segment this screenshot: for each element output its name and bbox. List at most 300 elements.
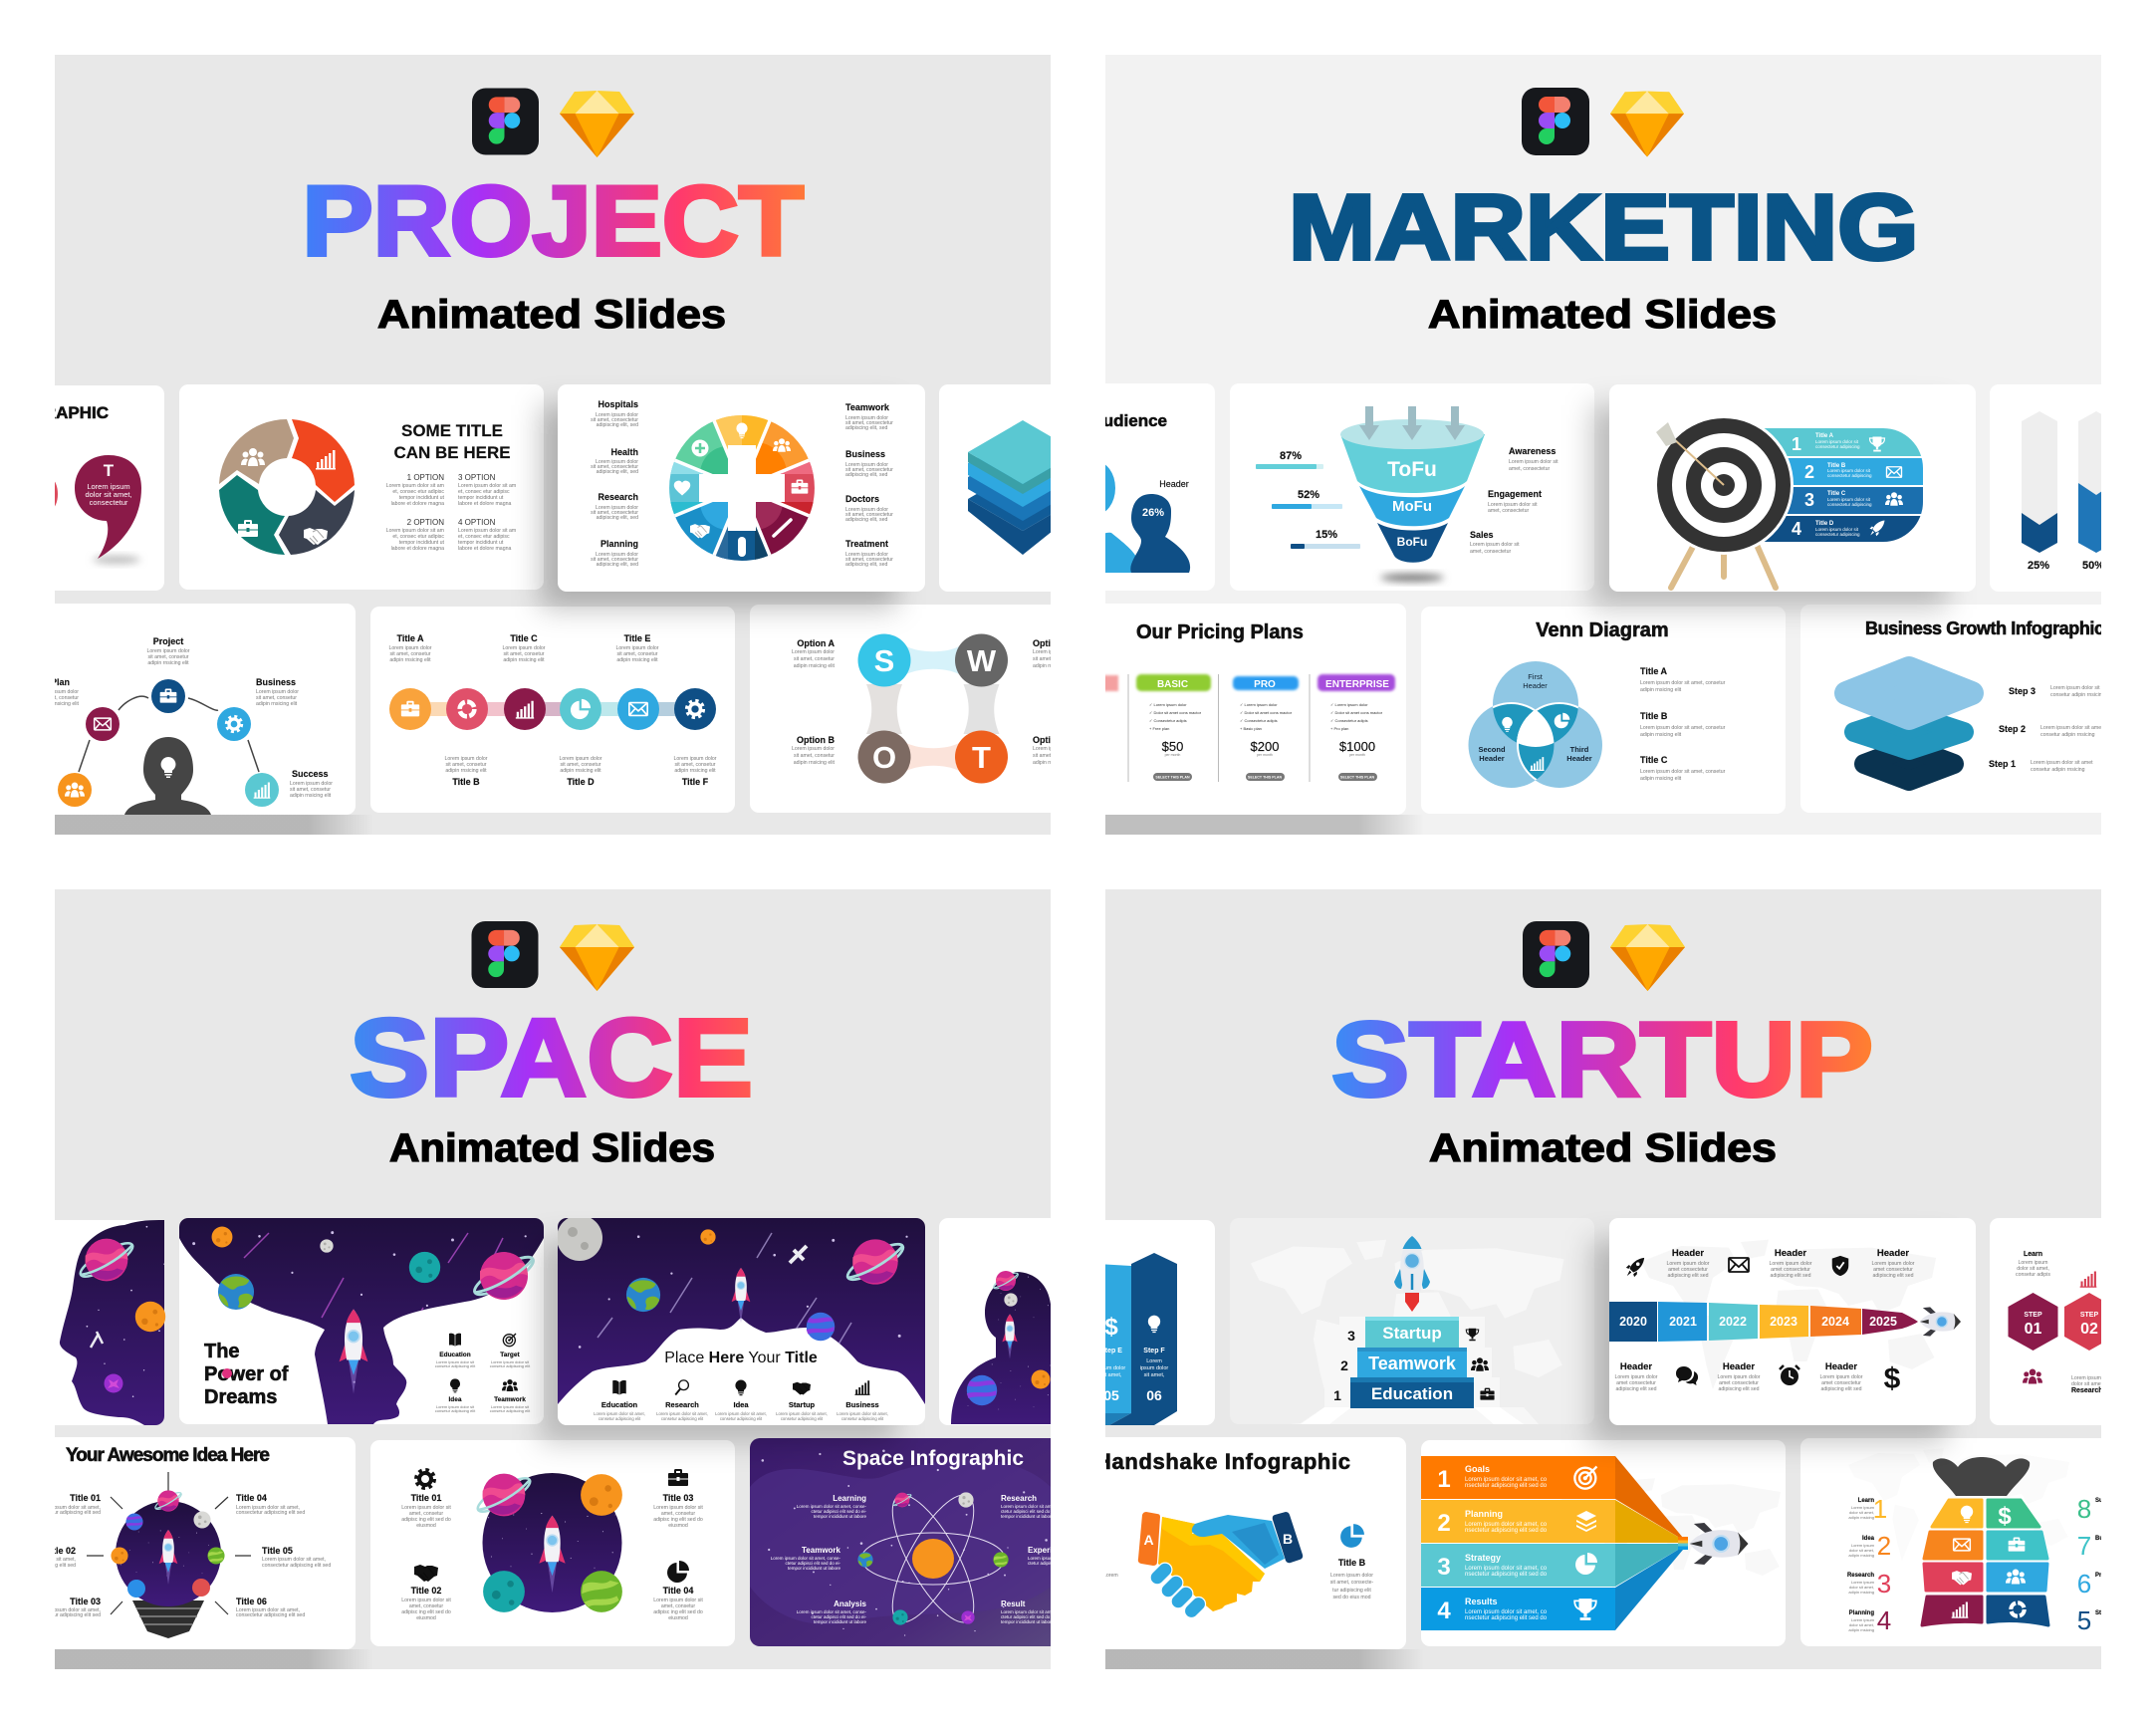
card: place here your title: Idea — [733, 1400, 749, 1409]
card: medical wheel: Hospitals — [598, 399, 638, 409]
chart: funnel: MoFu — [1392, 498, 1432, 515]
card: timeline ribbon: adipiscing elit sed — [1719, 1386, 1760, 1392]
card: timeline circles: Title C — [510, 633, 538, 643]
card: planets circle: Lorem ipsum dolor sit — [401, 1598, 451, 1603]
card: stair steps — [1230, 1218, 1594, 1424]
card: timeline ribbon: amet consectetur — [1873, 1267, 1913, 1273]
card: pricing plans: + Free plan — [1149, 726, 1169, 731]
icon: handshake: A — [1143, 1532, 1154, 1548]
card: timeline circles: adipin rnsicing elit — [503, 657, 545, 663]
icon: sketch logo — [560, 91, 634, 157]
card: medical wheel: Health — [610, 447, 638, 457]
icon: bullseye — [1654, 415, 1794, 588]
card: planets circle: amet, consetur — [409, 1511, 443, 1517]
title: space: SPACE — [350, 997, 753, 1119]
card: planets circle: adipisc ing elit sed do — [653, 1609, 703, 1615]
chart: three circle venn: First — [1528, 672, 1544, 681]
card: four goals rocket: nsectetur adipiscing elit sed do — [1465, 1483, 1548, 1489]
card: power of dreams: The — [204, 1341, 240, 1362]
card: four goals rocket: Planning — [1465, 1509, 1503, 1519]
chart: progress bars — [1256, 450, 1360, 549]
card: four goals rocket: nsectetur adipiscing elit sed do — [1465, 1615, 1548, 1621]
card: medical wheel: adipiscing elit, sed — [597, 422, 638, 428]
card: cycle donut: tempor incididunt ut — [458, 540, 504, 546]
card: cycle donut: 4 OPTION — [458, 518, 496, 527]
card: space infographic: Lorem ipsum dolor sit amet, conse- — [797, 1609, 866, 1614]
card: place here your title: Lorem ipsum dolor sit amet, — [594, 1411, 645, 1416]
card: timeline circles: sit amet, consetur — [675, 762, 716, 768]
card: medical wheel: Lorem ipsum dolor — [596, 552, 638, 558]
card: money bag: dolor sit amet, — [1849, 1585, 1874, 1590]
card: cycle donut — [179, 384, 544, 590]
card: steps columns — [1076, 1220, 1215, 1425]
card: hexagon steps: 01 — [2025, 1321, 2041, 1338]
card: SWOT: W — [967, 643, 997, 678]
card: planets circle: eiusmod — [416, 1523, 436, 1529]
card: speech bubble infographic — [25, 385, 164, 591]
card: timeline circles: adipin rnsicing elit — [445, 768, 487, 774]
card: money bag: Planning — [1849, 1610, 1874, 1616]
card: cycle donut: tempor incididunt ut — [458, 495, 504, 501]
icon: figma logo — [1523, 921, 1589, 988]
card: planets circle: Title 01 — [411, 1493, 441, 1503]
card: venn diagram: Title A — [1640, 666, 1668, 676]
card: cycle donut: CAN BE HERE — [393, 443, 511, 462]
card: timeline circles: sit amet, consetur — [390, 651, 431, 657]
chart: converging stripes — [1421, 1456, 1749, 1630]
card: awesome idea bulb: Title 04 — [236, 1493, 267, 1503]
card: pricing plans: SELECT THIS PLAN — [1248, 775, 1282, 779]
card: space infographic: tempor incididunt ut labore — [788, 1566, 840, 1571]
card: pricing plans: ✓ Lorem ipsum dolor — [1149, 702, 1187, 707]
card: medical wheel: Lorem ipsum dolor — [845, 552, 888, 558]
icon: figma logo — [472, 88, 539, 155]
card: funnel: amet, consectetur — [1470, 549, 1512, 555]
card: place here your title — [557, 1215, 925, 1425]
card: timeline circles: sit amet, consetur — [446, 762, 487, 768]
card: target: Lorem ipsum dolor sit — [1827, 468, 1871, 473]
card: speech bubble infographic: consectetur — [90, 498, 128, 507]
card: pricing plans: SELECT THIS PLAN — [1155, 775, 1190, 779]
card: space infographic: Teamwork — [802, 1546, 841, 1555]
card: planets circle: Title 02 — [411, 1586, 441, 1596]
card: funnel — [1230, 383, 1594, 591]
chart: three circle venn — [1468, 661, 1602, 788]
card: timeline ribbon — [1609, 1218, 1976, 1425]
icon: handshake: B — [1283, 1531, 1293, 1547]
card: medical wheel: Lorem ipsum dolor — [845, 462, 888, 468]
card: timeline ribbon: adipiscing elit sed — [1771, 1273, 1811, 1279]
card: timeline ribbon: amet consectetur — [1616, 1380, 1656, 1386]
card: planets circle: Lorem ipsum dolor sit — [653, 1505, 703, 1511]
card: medical wheel: sit amet, consectetur — [591, 557, 638, 563]
card: SWOT — [750, 605, 1078, 813]
card: planets circle: eiusmod — [668, 1615, 688, 1621]
card: power of dreams: consetur adipiscing elit — [435, 1363, 476, 1368]
card: medical wheel: adipiscing elit, sed — [845, 425, 888, 431]
card: place here your title: Business — [845, 1400, 879, 1409]
card: money bag: 3 — [1877, 1569, 1891, 1599]
card: medical wheel: adipiscing elit, sed — [597, 515, 638, 521]
card: audience — [1076, 383, 1215, 591]
card: awesome idea bulb: Lorem ipsum dolor sit amet, — [236, 1505, 300, 1511]
card: timeline ribbon: $ — [1884, 1362, 1901, 1395]
card: awesome idea bulb: Title 05 — [262, 1546, 293, 1556]
card: money bag: adipin rnsicing — [1848, 1553, 1874, 1558]
chart: money bag puzzle: $ — [1998, 1503, 2012, 1530]
card: target: 2 — [1804, 462, 1814, 482]
card: four goals rocket: Results — [1465, 1597, 1498, 1606]
card: business growth: Step 1 — [1989, 759, 2016, 769]
card: money bag — [1800, 1438, 2129, 1646]
card: SWOT: T — [972, 740, 991, 775]
card: pricing plans: SELECT THIS PLAN — [1340, 775, 1374, 779]
card: pricing plans: $50 — [1162, 739, 1183, 754]
card: four goals rocket — [1421, 1440, 1786, 1646]
card: medical wheel: Planning — [600, 539, 638, 549]
card: pricing plans: BASIC — [1157, 679, 1188, 690]
card: business growth: Lorem ipsum dolor sit amet — [2040, 725, 2101, 731]
card: SWOT: sit amet, consetur — [794, 753, 835, 759]
card: planets circle: Title 03 — [663, 1493, 693, 1503]
card: stair steps: 2 — [1340, 1357, 1348, 1373]
shadow strip under lower-left card — [1105, 1649, 1424, 1669]
card: target: consectetur adipiscing — [1827, 502, 1872, 507]
card: medical wheel: Lorem ipsum dolor — [845, 415, 888, 421]
shadow cast by timeline card — [1591, 1240, 1947, 1443]
icon: sketch logo — [1610, 91, 1684, 157]
card: SWOT: adipin rnsicing elit — [794, 760, 836, 766]
card: timeline ribbon: Header — [1877, 1248, 1909, 1259]
card: steps columns: 06 — [1146, 1387, 1162, 1403]
card: timeline circles: Lorem ipsum dolor — [503, 645, 546, 651]
card: cycle donut: 1 OPTION — [407, 473, 444, 482]
card: pricing plans: ✓ Dolor sit amet cons mactor — [1330, 710, 1383, 715]
chart: three circle venn: Header — [1566, 754, 1592, 763]
card: cycle donut: tempor incididunt ut — [399, 540, 445, 546]
card: awesome idea bulb: Lorem ipsum dolor sit amet, — [236, 1607, 300, 1613]
card: place here your title: Startup — [789, 1400, 816, 1409]
subtitle: Animated Slides — [377, 293, 726, 337]
chart: progress bars: 15% — [1316, 529, 1337, 541]
card: money bag: dolor sit amet, — [1849, 1622, 1874, 1627]
chart: four arrow donut — [219, 419, 355, 555]
card: medical wheel: sit amet, consectetur — [845, 467, 893, 473]
card: medical wheel: Business — [845, 449, 885, 459]
card: four goals rocket: Lorem ipsum dolor sit amet, co — [1465, 1609, 1548, 1615]
card: money bag: dolor sit amet, — [1849, 1510, 1874, 1515]
card: power of dreams: consetur adipiscing elit — [490, 1408, 531, 1413]
card: pricing plans: ✓ Consectetur adipis — [1330, 718, 1368, 723]
card: timeline circles: Title F — [682, 777, 709, 787]
card: medical wheel: sit amet, consectetur — [591, 464, 638, 470]
card: venn diagram: Title B — [1640, 711, 1668, 721]
card: four goals rocket: nsectetur adipiscing elit sed do — [1465, 1572, 1548, 1578]
card: space infographic: Research — [1001, 1494, 1037, 1503]
card: timeline circles: Title A — [396, 633, 424, 643]
card: place here your title: consetur adipiscing elit — [661, 1416, 704, 1421]
subtitle: Animated Slides — [1429, 1126, 1777, 1170]
subtitle: Animated Slides — [1428, 293, 1777, 337]
card: funnel: amet, consectetur — [1509, 466, 1551, 472]
chart: eight segment wheel — [669, 415, 815, 561]
card: cycle donut: Lorem ipsum dolor sit am — [386, 528, 444, 534]
card: timeline circles: Lorem ipsum dolor — [560, 756, 602, 762]
card: pricing plans: ✓ Lorem ipsum dolor — [1240, 702, 1278, 707]
card: space infographic: ctetur adipisci elit sed do ei- — [811, 1509, 866, 1514]
card: planets circle: amet, consetur — [661, 1603, 695, 1609]
card: hexagon steps: Learn — [2024, 1251, 2042, 1258]
card: cycle donut: tempor incididunt ut — [399, 495, 445, 501]
card: timeline ribbon: Lorem ipsum dolor — [1615, 1374, 1658, 1380]
card: timeline ribbon: Lorem ipsum dolor — [1770, 1261, 1812, 1267]
card: project arc: Lorem ipsum dolor — [256, 689, 299, 695]
shadow cast by place-here card — [541, 1240, 896, 1443]
card: hexagon steps: 02 — [2080, 1321, 2098, 1338]
card: power of dreams: Lorem ipsum dolor sit — [491, 1404, 530, 1409]
card: timeline circles: adipin rnsicing elit — [389, 657, 431, 663]
card: awesome idea bulb — [55, 1437, 356, 1649]
card: business growth: Business Growth Infographic — [1865, 618, 2101, 638]
card: funnel: Sales — [1470, 530, 1494, 540]
card: timeline circles: Lorem ipsum dolor — [389, 645, 432, 651]
card: medical wheel: adipiscing elit, sed — [597, 469, 638, 475]
card: hexagon steps: STEP — [2024, 1312, 2042, 1319]
card: medical wheel: Lorem ipsum dolor — [596, 459, 638, 465]
card: venn diagram: Lorem ipsum dolor sit amet, consetur — [1640, 769, 1726, 775]
card: hexagon steps: consetur adipis — [2016, 1272, 2050, 1278]
card: four goals rocket: nsectetur adipiscing elit sed do — [1465, 1528, 1548, 1534]
card: place here your title: consetur adipiscing elit — [781, 1416, 824, 1421]
card: space infographic: Analysis — [834, 1599, 867, 1608]
card: timeline circles: Title D — [567, 777, 595, 787]
card: SWOT: Option B — [797, 735, 835, 745]
card: pricing plans: per month — [1349, 753, 1365, 757]
card: timeline ribbon: Header — [1825, 1361, 1857, 1372]
card: timeline circles: sit amet, consetur — [504, 651, 545, 657]
card: money bag: 8 — [2077, 1494, 2091, 1524]
chart: three circle venn: Header — [1523, 681, 1548, 690]
card: audience: Header — [1159, 479, 1189, 489]
card: money bag: adipin rnsicing — [1848, 1590, 1874, 1595]
card: power of dreams: Teamwork — [494, 1396, 526, 1403]
chart: year ribbon: 2020 — [1619, 1315, 1647, 1329]
card: funnel: Lorem ipsum dolor sit — [1488, 502, 1538, 508]
card: timeline circles: sit amet, consetur — [561, 762, 601, 768]
card: timeline ribbon: amet consectetur — [1771, 1267, 1810, 1273]
card: timeline circles: adipin rnsicing elit — [560, 768, 601, 774]
card: money bag: adipin rnsicing — [1848, 1515, 1874, 1520]
card: money bag: 1 — [1873, 1494, 1887, 1524]
card: medical wheel: Treatment — [845, 539, 888, 549]
card: timeline ribbon: Header — [1723, 1361, 1755, 1372]
card: pricing plans: ✓ Dolor sit amet cons mactor — [1240, 710, 1293, 715]
card: planets circle: eiusmod — [668, 1523, 688, 1529]
card: pricing plans: Our Pricing Plans — [1136, 621, 1304, 643]
icon: figma logo — [1522, 88, 1589, 155]
card: money bag: Learn — [1858, 1498, 1874, 1504]
card: project arc: sit amet, consetur — [290, 787, 331, 793]
card: planets circle: Lorem ipsum dolor sit — [401, 1505, 451, 1511]
icon: sketch logo — [1610, 924, 1685, 991]
card: layer stack — [939, 384, 1088, 592]
card: stair steps: Education — [1371, 1384, 1453, 1403]
card: medical wheel: Research — [598, 492, 638, 502]
card: money bag: Lorem ipsum — [1851, 1505, 1875, 1510]
card: bars: 25% — [2028, 560, 2049, 572]
card: SWOT: Lorem ipsum dolor — [792, 746, 835, 752]
card: cycle donut: 2 OPTION — [407, 518, 444, 527]
card: venn diagram: Title C — [1640, 755, 1668, 765]
icon: bulb of planets — [111, 1490, 225, 1638]
card: timeline ribbon: amet consectetur — [1719, 1380, 1759, 1386]
panel: project slides — [55, 55, 1051, 835]
card: audience: 26% — [1142, 507, 1164, 519]
card: place here your title: Lorem ipsum dolor sit amet, — [656, 1411, 708, 1416]
card: pricing plans: per month — [1165, 753, 1180, 757]
shadow cast by target card — [1591, 405, 1947, 609]
shadow strip under lower-left card — [55, 1649, 373, 1669]
card: target: Title D — [1815, 521, 1834, 527]
panel: startup slides — [1105, 889, 2101, 1669]
card: money bag: Lorem ipsum — [1851, 1543, 1875, 1548]
card: planets circle: Title 04 — [663, 1586, 693, 1596]
card: timeline ribbon: amet consectetur — [1821, 1380, 1861, 1386]
card: medical wheel — [558, 384, 925, 592]
card: funnel: Lorem ipsum dolor sit — [1470, 542, 1520, 548]
card: timeline ribbon: Lorem ipsum dolor — [1872, 1261, 1915, 1267]
card: medical wheel: adipiscing elit, sed — [845, 517, 888, 523]
chart: atom orbit — [857, 1484, 1009, 1633]
card: power of dreams: Lorem ipsum dolor sit — [436, 1404, 475, 1409]
shadow strip under lower-left card — [55, 815, 373, 835]
card: project arc: Project — [153, 636, 183, 646]
card: funnel: Lorem ipsum dolor sit — [1509, 459, 1558, 465]
card: medical wheel: sit amet, consectetur — [591, 417, 638, 423]
card: cycle donut: Lorem ipsum dolor sit am — [386, 483, 444, 489]
card: timeline circles: Lorem ipsum dolor — [674, 756, 717, 762]
card: power of dreams: Idea — [448, 1396, 462, 1403]
card: stair steps: Startup — [1382, 1324, 1442, 1343]
card: planets circle: amet, consetur — [661, 1511, 695, 1517]
card: money bag: 2 — [1877, 1531, 1891, 1561]
card: target: Title B — [1827, 463, 1846, 469]
card: pricing plans: ✓ Consectetur adipis — [1240, 718, 1278, 723]
card: four goals rocket: Strategy — [1465, 1553, 1501, 1563]
card: four goals rocket: 4 — [1437, 1598, 1451, 1624]
card: place here your title: Lorem ipsum dolor sit amet, — [715, 1411, 767, 1416]
card: project arc — [25, 604, 356, 815]
card: four goals rocket: Lorem ipsum dolor sit amet, co — [1465, 1477, 1548, 1483]
card: handshake: Title B — [1338, 1558, 1366, 1568]
card: venn diagram: Venn Diagram — [1536, 619, 1669, 641]
icon: sketch logo — [560, 924, 634, 991]
card: project arc: adipin rnsicing elit — [290, 793, 332, 799]
card: four goals rocket: 2 — [1437, 1510, 1451, 1537]
card: planets circle: eiusmod — [416, 1615, 436, 1621]
card: target: Title A — [1815, 433, 1834, 439]
card: power of dreams: Power of — [204, 1363, 289, 1385]
card: speech bubble infographic: T — [104, 461, 115, 480]
chart: four row pill — [1765, 428, 1923, 542]
card: handshake: sit amet, consecte- — [1330, 1580, 1374, 1586]
card: cycle donut: labore et dolore magna — [458, 501, 511, 507]
card: target: Lorem ipsum dolor sit — [1815, 439, 1859, 444]
card: medical wheel: adipiscing elit, sed — [845, 472, 888, 478]
card: funnel: Awareness — [1509, 446, 1556, 456]
card: power of dreams: Target — [500, 1352, 521, 1358]
card: cycle donut: 3 OPTION — [458, 473, 496, 482]
chart: year ribbon: 2021 — [1669, 1315, 1697, 1329]
card: money bag: Research — [1847, 1573, 1874, 1579]
card: steps columns: sit amet, — [1144, 1372, 1165, 1378]
card: SWOT: Option A — [797, 638, 835, 648]
card: medical wheel: sit amet, consectetur — [845, 557, 893, 563]
card: medical wheel: adipiscing elit, sed — [597, 562, 638, 568]
card: project arc: Success — [292, 769, 329, 779]
card: timeline circles — [370, 607, 735, 813]
chart: year ribbon: 2024 — [1821, 1315, 1849, 1329]
chart: year ribbon: 2023 — [1770, 1315, 1797, 1329]
card: SWOT: S — [874, 643, 894, 678]
panel: marketing slides — [1105, 55, 2101, 835]
card: cycle donut: SOME TITLE — [401, 421, 503, 440]
card: awesome idea bulb: Your Awesome Idea Here — [66, 1445, 270, 1466]
card: hexagon steps: Lorem ipsum — [2071, 1375, 2101, 1381]
shadow strip under lower-left card — [1105, 815, 1424, 835]
card: speech bubble infographic: Lorem ipsum — [87, 482, 130, 491]
card: handshake: sed do eius mod — [1332, 1595, 1371, 1600]
card: timeline circles: Title E — [624, 633, 650, 643]
card: timeline ribbon: adipiscing elit sed — [1821, 1386, 1862, 1392]
card: target: consectetur adipiscing — [1815, 444, 1860, 449]
card: stair steps: 3 — [1347, 1328, 1355, 1344]
card: medical wheel: Doctors — [845, 494, 879, 504]
card: planets circle — [370, 1440, 735, 1646]
card: place here your title: consetur adipiscing elit — [720, 1416, 763, 1421]
card: pricing plans — [1076, 604, 1406, 815]
card: timeline ribbon: amet consectetur — [1668, 1267, 1708, 1273]
card: place here your title: consetur adipiscing elit — [599, 1416, 641, 1421]
card: medical wheel: Lorem ipsum dolor — [845, 507, 888, 513]
card: cycle donut: labore et dolore magna — [391, 546, 444, 552]
card: hexagon steps: Lorem ipsum — [2019, 1260, 2047, 1266]
shadow cast by medical wheel card — [541, 405, 896, 609]
card: business growth: consetur adipin rnsicing — [2040, 732, 2095, 738]
card: space infographic: Result — [1001, 1599, 1026, 1608]
card: money bag: 6 — [2077, 1569, 2091, 1599]
card: space infographic: ctetur adipisci elit sed do ei- — [811, 1614, 866, 1619]
card: space infographic: Space Infographic — [842, 1447, 1024, 1470]
card: awesome idea bulb: Lorem ipsum dolor sit amet, — [262, 1557, 326, 1563]
card: cycle donut: et, consec etur adipisc — [392, 534, 444, 540]
chart: three circle venn: Header — [1479, 754, 1505, 763]
card: stair steps: 1 — [1333, 1387, 1341, 1403]
card: project arc: adipin rnsicing elit — [256, 701, 298, 707]
card: place here your title: Lorem ipsum dolor sit amet, — [837, 1411, 888, 1416]
card: money bag: Lorem ipsum — [1851, 1580, 1875, 1585]
card: venn diagram — [1421, 607, 1786, 814]
chart: three circle venn: Third — [1570, 745, 1589, 754]
card: target: 3 — [1804, 490, 1814, 510]
chart: year ribbon — [1609, 1302, 1961, 1342]
card: awesome idea bulb: Title 06 — [236, 1597, 267, 1606]
card: cycle donut: et, consec etur adipisc — [392, 489, 444, 495]
card: target: consectetur adipiscing — [1827, 473, 1872, 478]
card: power of dreams: Lorem ipsum dolor sit — [491, 1359, 530, 1364]
card: medical wheel: sit amet, consectetur — [591, 510, 638, 516]
card: handshake: Lorem ipsum dolor — [1330, 1573, 1373, 1579]
